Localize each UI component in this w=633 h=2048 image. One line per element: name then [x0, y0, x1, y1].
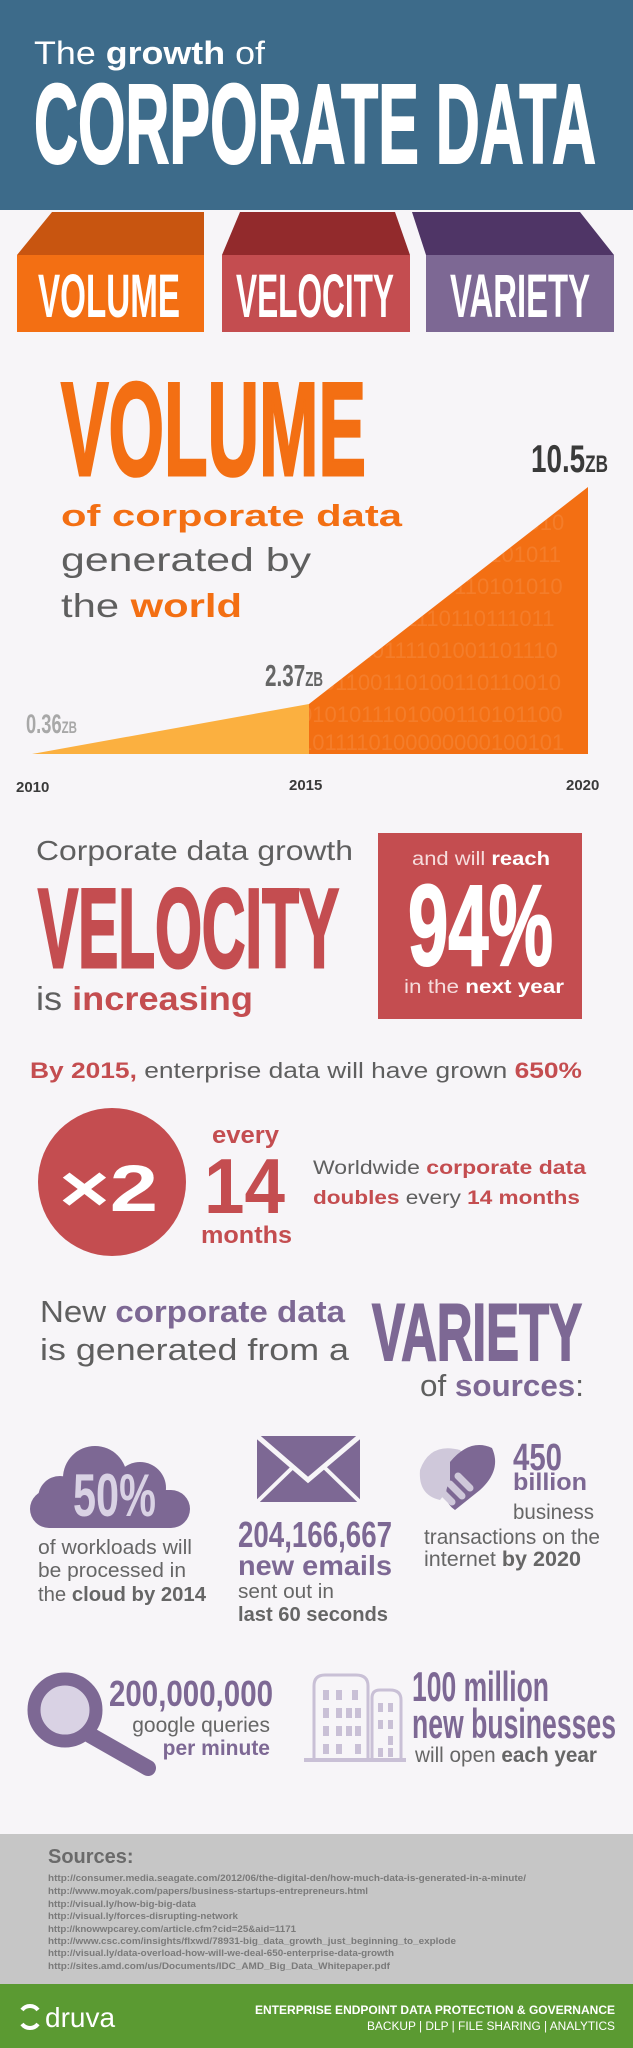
sources panel: http://www.moyak.com/papers/business-startups-entrepreneurs.html [48, 1886, 368, 1897]
callout: 94%: 94% [408, 862, 553, 990]
stat: transactions: billion [513, 1469, 587, 1496]
sources panel: http://consumer.media.seagate.com/2012/06/the-digital-den/how-much-data-is-generated-in-a-minute/ [48, 1873, 526, 1884]
area chart [16, 438, 608, 796]
volume heading [61, 356, 403, 624]
variety heading: New corporate data [40, 1294, 346, 1329]
axis years: 2020 [566, 777, 599, 794]
stat: google queries: google queries [132, 1714, 270, 1737]
stat: transactions: transactions on the [424, 1526, 600, 1549]
icon: x2 circle [38, 1108, 186, 1256]
label: 10.5ZB: 10.5ZB [531, 438, 608, 481]
logo: druva: druva [45, 2002, 115, 2033]
stat: cloud 50% [30, 1446, 207, 1606]
icon: cloud [30, 1446, 190, 1528]
variety heading: is generated from a [40, 1332, 350, 1367]
stat: emails: last 60 seconds [238, 1604, 388, 1626]
area chart: 0110100101101001011010 [300, 510, 564, 535]
icon: buildings [304, 1675, 406, 1760]
doubling stat: Worldwide corporate data [313, 1158, 587, 1179]
velocity heading: is increasing [36, 980, 253, 1017]
stat: cloud 50%: the cloud by 2014 [38, 1584, 207, 1606]
area chart: 0100110111101001101110 [300, 638, 558, 663]
variety heading [40, 1288, 584, 1403]
footer: ENTERPRISE ENDPOINT DATA PROTECTION & GOVERNANCE [255, 2005, 615, 2017]
stat: google queries: 200,000,000 [109, 1673, 273, 1714]
footer: BACKUP | DLP | FILE SHARING | ANALYTICS [367, 2021, 615, 2033]
stat: cloud 50%: 50% [73, 1462, 156, 1529]
volume heading: the world [61, 587, 242, 624]
velocity heading: Corporate data growth [36, 835, 353, 866]
label: 2.37ZB: 2.37ZB [265, 658, 323, 693]
volume heading: generated by [61, 541, 312, 578]
stat: transactions: business [513, 1501, 594, 1524]
volume heading: VOLUME [61, 356, 366, 504]
stat: cloud 50%: be processed in [38, 1560, 186, 1582]
stat: google queries [34, 1673, 273, 1768]
tab: velocity [222, 212, 410, 332]
icon: x2 circle: ×2 [59, 1151, 158, 1225]
doubling stat: 14 [204, 1142, 285, 1230]
callout: 94%: in the next year [404, 977, 565, 998]
stat: cloud 50%: of workloads will [38, 1537, 192, 1559]
stat: google queries: per minute [163, 1737, 270, 1760]
stat: transactions: internet by 2020 [424, 1548, 581, 1571]
velocity heading [36, 835, 353, 1017]
sources panel: http://visual.ly/forces-disrupting-network [48, 1911, 239, 1922]
icon: handshake [420, 1445, 495, 1510]
variety heading: of sources: [420, 1368, 584, 1403]
sources panel: Sources: [48, 1846, 134, 1868]
callout: 94% [378, 833, 582, 1019]
area chart: 1101011010110101101011 [300, 542, 561, 567]
icon: envelope [257, 1436, 360, 1502]
area chart: 1011110100000000100101 [300, 730, 564, 755]
stat: new businesses [304, 1663, 616, 1767]
stat: emails: new emails [238, 1550, 392, 1581]
volume heading: of corporate data [61, 498, 403, 533]
tabs [17, 212, 614, 332]
stat: transactions: 450 [513, 1437, 562, 1479]
sources panel: http://www.csc.com/insights/flxwd/78931-big_data_growth_just_beginning_to_explode [48, 1936, 456, 1947]
stat: emails: sent out in [238, 1581, 334, 1603]
stat: new businesses: 100 million [412, 1663, 549, 1710]
icon: magnifier [34, 1679, 148, 1768]
sources panel: http://knowwpcarey.com/article.cfm?cid=25&aid=1171 [48, 1924, 297, 1935]
area chart: 1011011101110110111011 [300, 606, 554, 631]
area chart: 0011010101110110101010 [300, 574, 563, 599]
subtitle: The growth of: The growth of [34, 35, 265, 71]
area chart: 0101011101000110101100 [300, 702, 563, 727]
doubling stat: every [212, 1122, 280, 1149]
stat: new businesses: will open each year [414, 1744, 597, 1767]
axis years: 2015 [289, 777, 322, 794]
velocity heading: VELOCITY [38, 866, 339, 991]
header [0, 0, 633, 210]
stat: 650%: By 2015, enterprise data will have grown 650% [30, 1058, 582, 1083]
stat: emails [238, 1436, 392, 1626]
axis years [16, 777, 599, 796]
area chart: 1101100110100110110010 [300, 670, 561, 695]
doubling stat [38, 1108, 587, 1256]
tab: volume: VOLUME [38, 262, 180, 330]
doubling stat: months [201, 1222, 292, 1249]
sources panel [0, 1834, 633, 1984]
footer [0, 1984, 633, 2048]
sources panel: http://sites.amd.com/us/Documents/IDC_AMD_Big_Data_Whitepaper.pdf [48, 1961, 391, 1972]
stat: emails: 204,166,667 [238, 1514, 392, 1555]
axis years: 2010 [16, 779, 49, 796]
sources panel: http://visual.ly/how-big-big-data [48, 1899, 197, 1910]
doubling stat: doubles every 14 months [313, 1188, 580, 1209]
label: 0.36ZB: 0.36ZB [26, 709, 77, 739]
sources panel: http://visual.ly/data-overload-how-will-we-deal-650-enterprise-data-growth [48, 1948, 394, 1959]
tab: variety [412, 212, 614, 332]
callout: 94%: and will reach [412, 849, 550, 870]
stat: transactions [420, 1437, 600, 1571]
tab: velocity: VELOCITY [236, 262, 394, 330]
tab: volume [17, 212, 204, 332]
